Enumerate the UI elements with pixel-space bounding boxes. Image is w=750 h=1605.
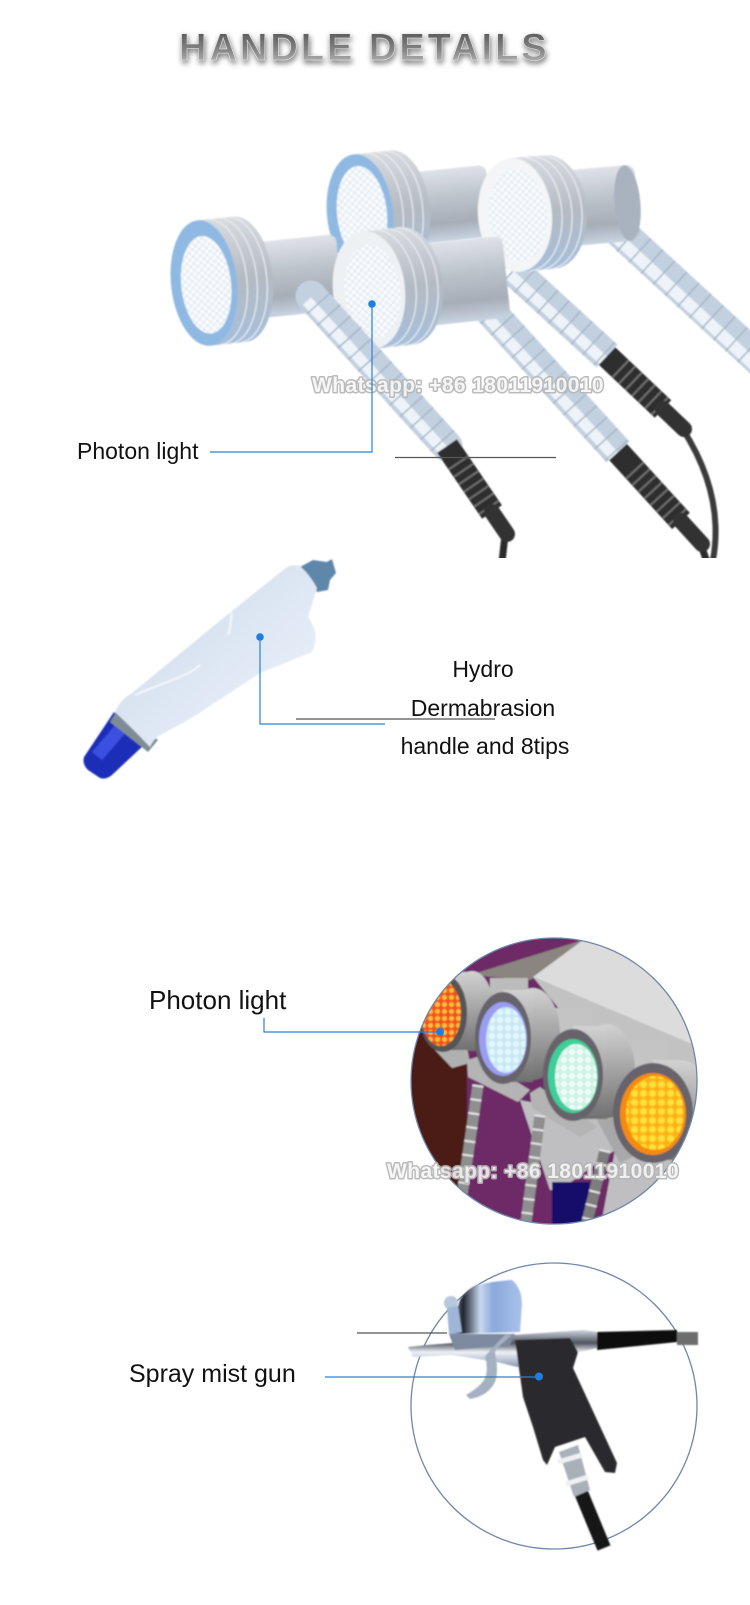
watermark: Whatsapp: +86 18011910010 — [387, 1160, 679, 1183]
grey collar — [110, 709, 158, 752]
barrel — [408, 1330, 597, 1367]
label: photon light: Photon light — [77, 438, 199, 464]
circle outline: spray gun — [411, 1263, 697, 1549]
knurled end — [677, 1332, 698, 1345]
title: HANDLE DETAILS — [179, 27, 550, 69]
spring stems — [462, 1085, 478, 1195]
label: photon light — [77, 300, 556, 464]
label: hydro dermabrasion: Hydro — [452, 656, 514, 682]
label: hydro dermabrasion: Dermabrasion — [411, 695, 555, 721]
label: photon light lower — [149, 985, 444, 1036]
label: hydro dermabrasion: handle and 8tips — [401, 733, 569, 759]
handle: far right head and grip — [473, 147, 750, 375]
handle: back right grip and cable — [510, 270, 716, 560]
red light — [419, 971, 528, 1052]
hose — [580, 1490, 604, 1548]
hose connector — [559, 1445, 590, 1497]
handle: front left head — [170, 216, 338, 347]
green light — [542, 1024, 647, 1122]
handle: front left grip and cable — [307, 296, 507, 562]
photo: four photon light handles — [165, 141, 750, 562]
label: photon light lower: Photon light — [149, 985, 287, 1015]
watermark: Whatsapp: +86 18011910010 — [312, 374, 604, 397]
blue tip — [84, 712, 148, 779]
label: spray mist gun: Spray mist gun — [129, 1360, 296, 1388]
black rear tube — [597, 1330, 677, 1350]
grip — [515, 1338, 617, 1473]
photo circle: coloured photon lights — [410, 937, 698, 1225]
blue light — [475, 988, 593, 1084]
silver lower panels — [520, 1099, 673, 1215]
paint cup — [450, 1280, 522, 1334]
white handle body — [115, 565, 317, 747]
orange light — [612, 1060, 696, 1164]
photo: hydro dermabrasion handle — [84, 559, 336, 779]
photo: spray mist gun — [408, 1280, 698, 1548]
label: spray mist gun — [129, 1333, 543, 1388]
tail connector — [300, 559, 336, 592]
trigger — [466, 1335, 512, 1399]
label: hydro dermabrasion — [256, 633, 569, 759]
handle: front right head and grip — [327, 217, 707, 562]
mount blocks — [435, 1047, 470, 1068]
handle: back left head — [326, 150, 487, 254]
